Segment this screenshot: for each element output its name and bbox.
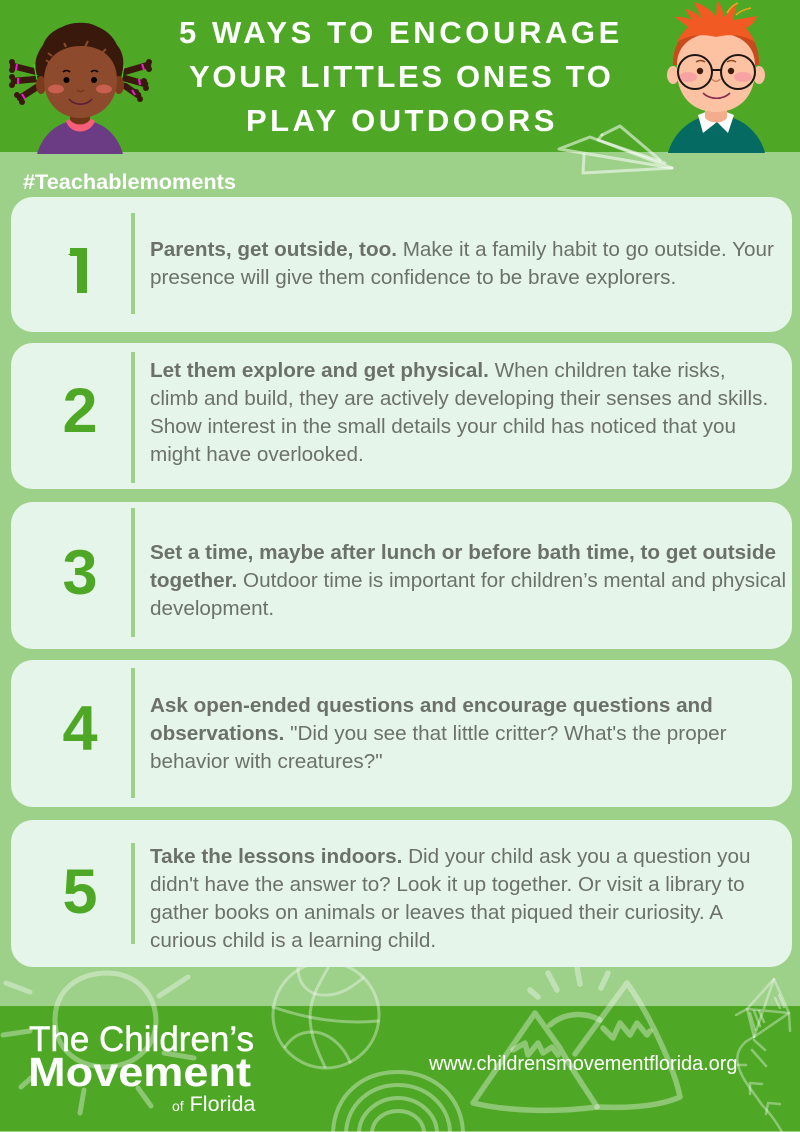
body: [37, 120, 123, 154]
nose and smile: [77, 90, 84, 92]
title: YOUR LITTLES ONES TO: [189, 59, 613, 94]
header band: [0, 0, 800, 152]
text: step 5: didn't have the answer to? Look it up together. Or visit a library to: [150, 873, 745, 896]
eyes: [697, 68, 703, 74]
ears: [667, 66, 679, 84]
text: step 1: Parents, get outside, too. Make it a family habit to go outside. Your: [150, 238, 774, 261]
illustration: girl: [9, 22, 152, 154]
text: step 2: [150, 359, 768, 466]
panel: step 2: [11, 343, 792, 489]
hair top: [675, 0, 757, 42]
footer band: [0, 1006, 800, 1131]
braids: [13, 65, 148, 98]
face: [44, 46, 117, 118]
hair parts: [46, 41, 106, 63]
text: step 3: development.: [150, 597, 274, 620]
text: step 3: [150, 541, 786, 620]
panel: step 4: [11, 660, 792, 807]
collar: [698, 108, 734, 133]
text: step 4: Ask open-ended questions and encourage questions and: [150, 694, 713, 717]
text: step 4: behavior with creatures?": [150, 750, 383, 773]
icon: sun doodle: [3, 973, 194, 1113]
text: step 2: might have overlooked.: [150, 443, 364, 466]
text: step 1: [150, 238, 774, 289]
logo: Movement: [28, 1049, 251, 1095]
title: [179, 15, 623, 138]
hair: [35, 23, 123, 85]
neck: [70, 112, 90, 124]
number 5: 5: [62, 857, 98, 927]
sweater: [668, 115, 765, 153]
icon: kite doodle: [736, 979, 790, 1132]
text: step 4: observations. "Did you see that little critter? What's the proper: [150, 722, 727, 745]
icon: basketball doodle: [273, 962, 379, 1068]
title: 5 WAYS TO ENCOURAGE: [179, 15, 623, 50]
text: step 1: presence will give them confidence to be brave explorers.: [150, 266, 676, 289]
text: step 5: Take the lessons indoors. Did your child ask you a question you: [150, 845, 751, 868]
logo: of Florida: [172, 1092, 255, 1116]
glasses: [678, 55, 712, 89]
text: step 5: [150, 845, 751, 952]
neck: [705, 105, 727, 122]
nose and smile: [712, 79, 720, 81]
panel: step 1: [11, 197, 792, 332]
cheeks: [679, 72, 697, 82]
icon: mountains doodle: [473, 968, 680, 1110]
number 1: 1: [62, 236, 98, 306]
panel: step 5: [11, 820, 792, 967]
text: step 4: [150, 694, 727, 773]
illustration: boy: [667, 0, 765, 153]
number 3: 3: [62, 538, 98, 608]
panel: step 3: [11, 502, 792, 649]
face: [677, 33, 755, 112]
icon: rainbow doodle: [333, 1072, 463, 1132]
website url: www.childrensmovementflorida.org: [429, 1053, 737, 1075]
collar: [66, 118, 95, 132]
logo: The Children’s: [29, 1020, 254, 1059]
number 4: 4: [62, 694, 98, 764]
eyes: [64, 77, 70, 83]
icon: paper plane: [558, 124, 674, 174]
text: step 5: curious child is a learning child.: [150, 929, 436, 952]
text: step 2: climb and build, they are actively developing their senses and skills.: [150, 387, 768, 410]
number 2: 2: [62, 376, 98, 446]
text: step 2: Let them explore and get physical. When children take risks,: [150, 359, 726, 382]
text: step 3: Set a time, maybe after lunch or before bath time, to get outside: [150, 541, 776, 564]
hair back: [673, 20, 759, 65]
ears: [36, 76, 46, 94]
text: step 2: Show interest in the small details your child has noticed that you: [150, 415, 736, 438]
text: step 5: gather books on animals or leaves that piqued their curiosity. A: [150, 901, 723, 924]
title: PLAY OUTDOORS: [246, 103, 558, 138]
cheeks: [48, 84, 64, 94]
hashtag: #Teachablemoments: [23, 169, 236, 194]
logo: [28, 1020, 256, 1116]
text: step 3: together. Outdoor time is important for children’s mental and physical: [150, 569, 786, 592]
